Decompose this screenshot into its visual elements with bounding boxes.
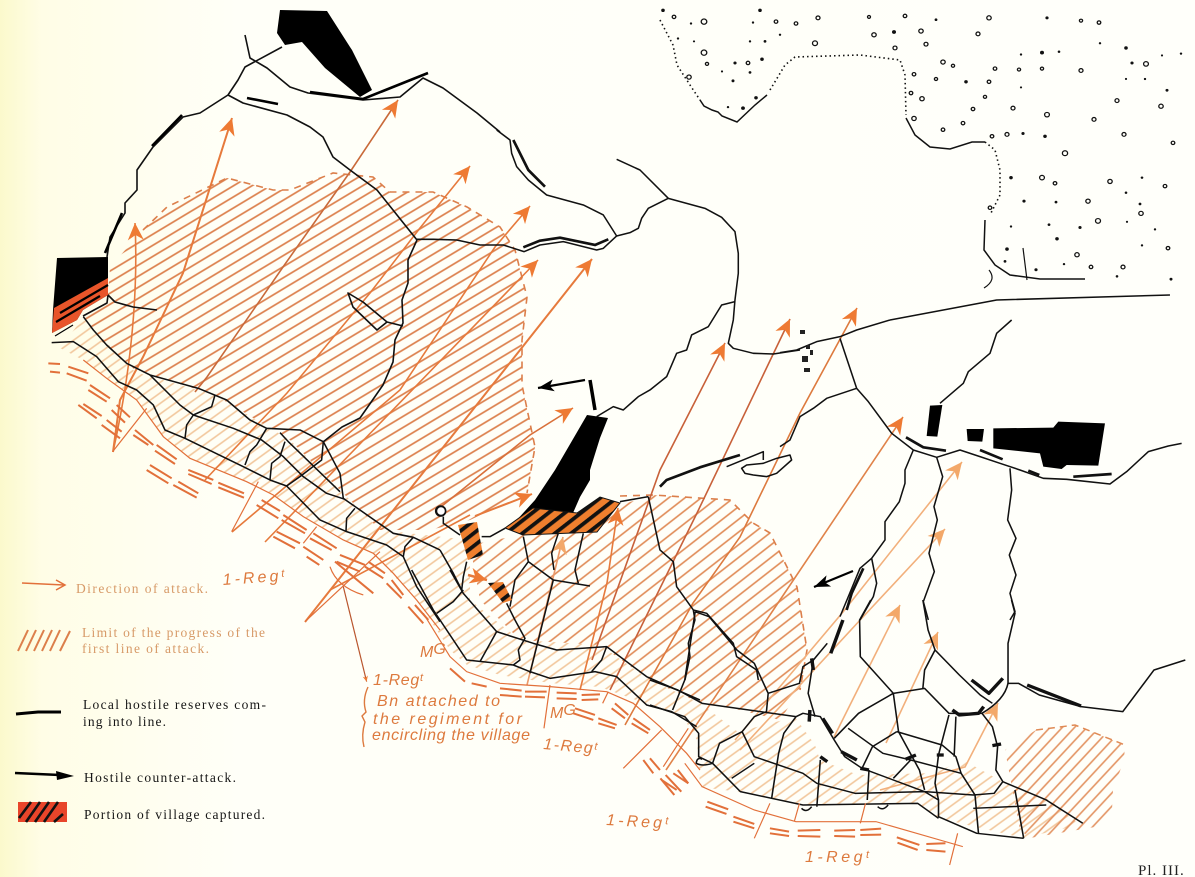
hatched limit of progress: right sector [1005,725,1125,838]
handwritten unit labels: M [420,644,433,661]
roads and ridge lines: north-west [83,35,500,442]
handwritten unit labels: 1-Reg [543,736,593,757]
hatched limit of progress: left sector [85,173,535,530]
forest edge [660,20,1085,288]
hatched limit of progress: centre sector [470,495,807,720]
regiment note with brace [362,672,530,747]
forest [660,9,1182,288]
orange lines of troops: south [423,613,700,790]
village: centre, partly captured [505,380,620,535]
legend: hostile counter-attack: Hostile counter-attack. [84,770,236,785]
village: west, partly captured [52,257,108,336]
handwritten unit labels: 1-Reg [222,568,279,589]
legend: limit of progress: first line of attack. [82,641,209,656]
legend: portion of village captured [18,802,265,822]
legend: local hostile reserves: Local hostile reserves com- [83,697,266,712]
regiment note with brace: Bn attached to [377,693,500,710]
regiment note with brace: 1-Reg [373,672,419,689]
handwritten unit labels: 1-Reg [606,812,662,832]
handwritten unit labels: t [665,815,670,827]
map details, lower right [650,600,1185,838]
handwritten unit labels: t [594,740,599,753]
legend: direction of attack: Direction of attack. [76,581,208,596]
roads and ridge lines: centre [436,452,792,680]
orange lines of troops: south-east [660,763,963,865]
regiment note with brace: t [420,672,424,684]
handwritten unit labels: G [563,702,576,719]
hostile counter-attack arrows [538,380,853,587]
legend: limit of progress [18,625,265,656]
handwritten unit labels: t [281,568,286,580]
captured hamlets [436,506,512,603]
copse [800,330,813,372]
legend: limit of progress: Limit of the progress of the [82,625,265,640]
local hostile reserves coming into line [105,73,428,253]
light hatched band along the river [60,318,1080,838]
handwritten unit labels [222,568,870,866]
village: north [277,10,372,97]
legend: hostile counter-attack [15,770,236,785]
handwritten unit labels: M [550,705,563,722]
orange lines of troops: west [48,360,440,682]
roads and ridge lines: south of centre [412,570,700,727]
forest tree symbols [661,9,1182,281]
legend [15,580,266,822]
regiment note with brace: the regiment for [373,711,523,728]
attack arrows [113,100,998,790]
roads and ridge lines: west river band [52,317,440,622]
legend: local hostile reserves: ing into line. [83,714,166,729]
roads and ridge lines: north-east [780,295,1182,620]
village: east [927,405,1105,469]
legend: portion of village captured: Portion of village captured. [84,807,265,822]
handwritten unit labels: t [866,849,870,861]
handwritten unit labels: G [433,641,446,658]
handwritten unit labels: 1-Reg [805,849,862,866]
legend: local hostile reserves [16,697,266,729]
roads and ridge lines: north-centre [417,130,800,417]
legend: direction of attack [22,580,208,596]
regiment note with brace: encircling the village [372,727,530,744]
